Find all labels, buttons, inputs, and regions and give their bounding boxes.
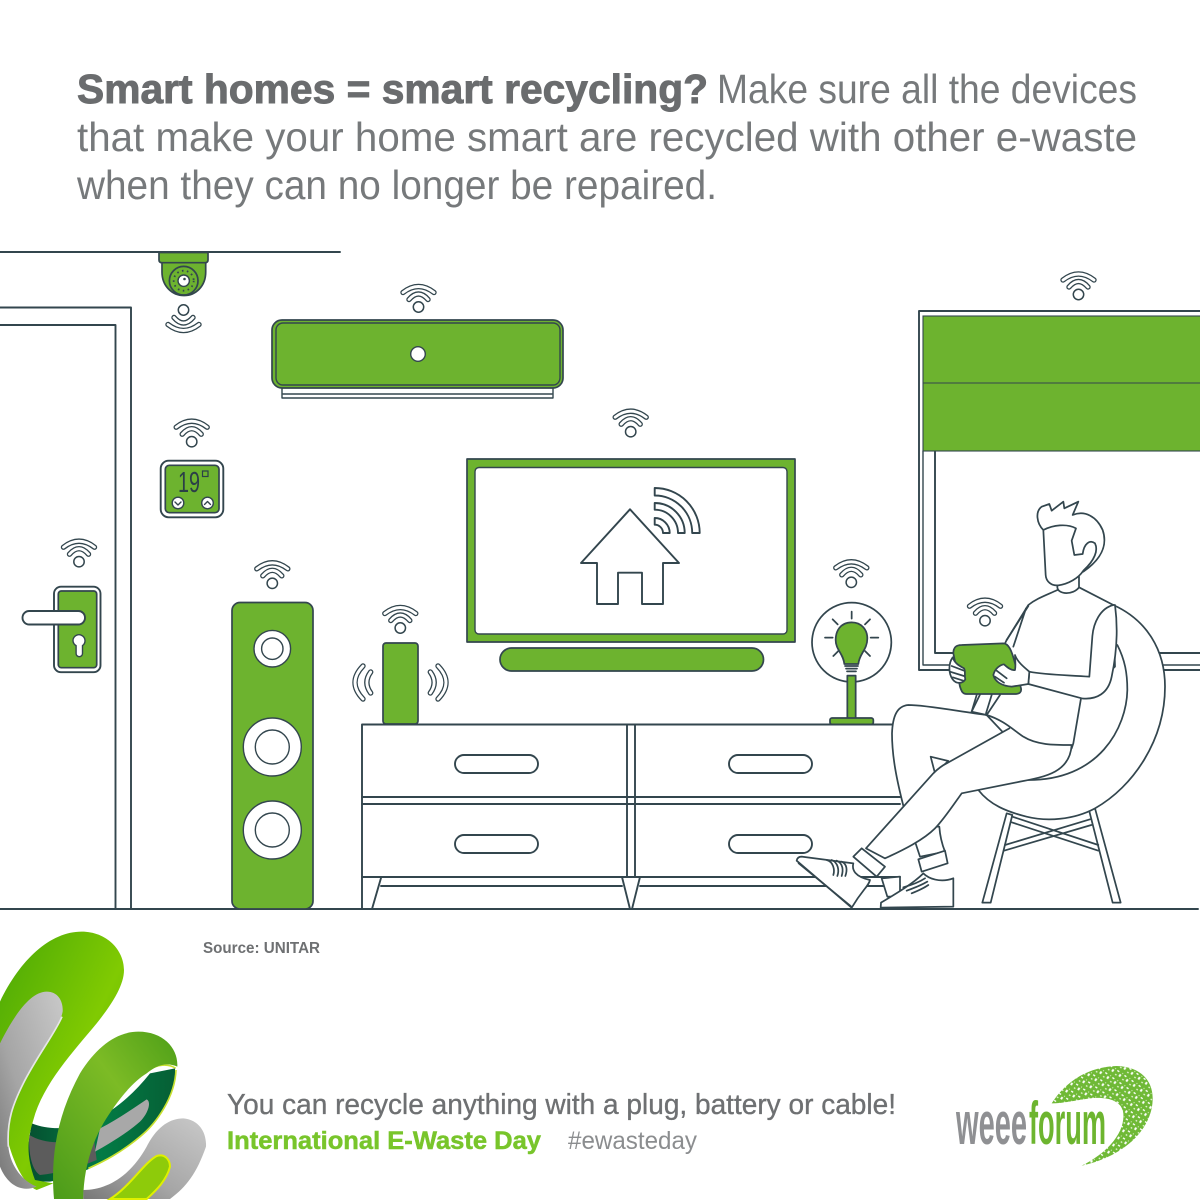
logo: WEEE Forum <box>956 1066 1153 1166</box>
title: heading text block: Smart homes = smart recycling? <box>77 66 708 112</box>
floor-standing speaker <box>232 563 313 909</box>
icon: smart house <box>581 488 700 604</box>
chair <box>978 605 1165 903</box>
smart lamp with bulb <box>812 562 891 724</box>
tagline: You can recycle anything with a plug, battery or cable! <box>227 1089 896 1121</box>
far leg and shoe <box>881 705 1013 908</box>
logo: WEEE Forum: forum <box>1029 1090 1106 1157</box>
title: heading text block: Make sure all the devices <box>717 66 1137 112</box>
title: heading text block <box>76 66 1137 208</box>
smart speaker with sound waves <box>355 608 446 724</box>
head and hair <box>1037 502 1104 593</box>
smart door lock <box>22 541 100 672</box>
left hand <box>949 657 965 683</box>
campaign name: International E-Waste Day <box>227 1127 541 1155</box>
logo: International E-Waste Day ribbon emblem <box>0 932 206 1199</box>
hashtag: #ewasteday <box>568 1127 697 1155</box>
cabinet with drawers <box>362 724 900 909</box>
near shoe <box>797 848 885 908</box>
title: heading text block: that make your home smart are recycled with other e-waste <box>77 114 1137 160</box>
tablet <box>953 643 1021 694</box>
logo: WEEE Forum: weee <box>956 1090 1027 1157</box>
thermostat <box>161 421 223 517</box>
near leg <box>866 715 1072 858</box>
person seated in chair with tablet <box>797 502 1165 908</box>
window with green blind <box>919 274 1200 670</box>
title: heading text block: when they can no longer be repaired. <box>76 162 717 208</box>
right hand <box>993 655 1029 687</box>
room structure: ceiling and floor lines <box>0 252 1198 909</box>
thermostat: 19 <box>178 467 200 499</box>
security camera <box>159 252 208 330</box>
arm <box>1028 605 1117 699</box>
torso <box>972 587 1115 748</box>
air conditioner <box>272 286 563 398</box>
television <box>467 411 795 642</box>
wifi above tablet <box>970 600 1000 626</box>
soundbar <box>500 648 764 671</box>
door frame <box>0 308 131 909</box>
source note: Source: UNITAR <box>203 940 320 957</box>
